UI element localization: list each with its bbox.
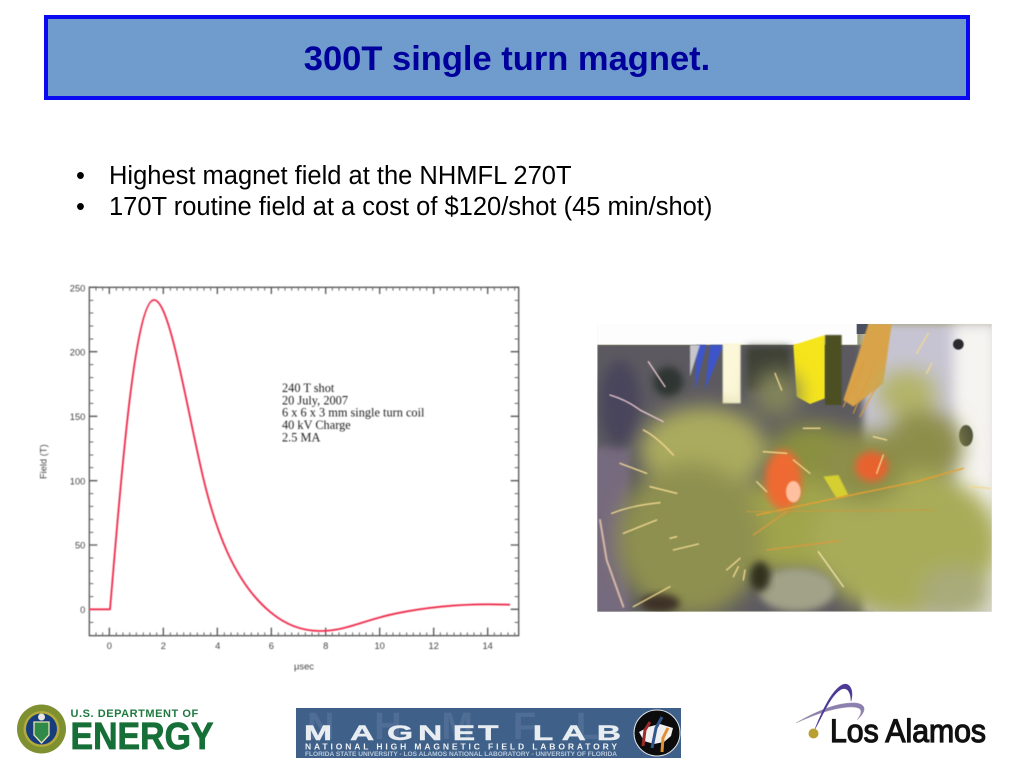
shot annotation: 20 July, 2007 <box>282 393 348 407</box>
x axis title: μsec <box>294 662 314 672</box>
bullet list: • <box>76 192 85 220</box>
glowing fragments <box>640 450 888 613</box>
laboratory name: NATIONAL HIGH MAGNETIC FIELD LABORATORY <box>305 742 617 752</box>
shot annotation: 2.5 MA <box>282 430 320 444</box>
x axis labels <box>107 641 493 651</box>
y axis labels: 0 <box>80 605 85 615</box>
bullet list: 170T routine field at a cost of $120/shot (45 min/shot) <box>109 192 712 220</box>
logo: National High Magnetic Field Laboratory <box>296 708 681 758</box>
title <box>44 15 970 100</box>
y axis labels: 50 <box>75 541 85 551</box>
x axis labels: 4 <box>215 641 220 651</box>
shot annotation: 240 T shot <box>282 381 335 395</box>
nucleus dot <box>808 728 818 738</box>
smoke cloud <box>617 370 1000 620</box>
bullet list: Highest magnet field at the NHMFL 270T <box>109 162 572 190</box>
banner background <box>296 708 681 758</box>
bullet list: • <box>76 162 85 190</box>
y axis title: Field (T) <box>39 444 49 479</box>
department text: U.S. DEPARTMENT OF <box>70 708 199 720</box>
wordmark: Los Alamos <box>830 713 986 749</box>
x axis labels: 0 <box>107 641 112 651</box>
x axis labels: 8 <box>323 641 328 651</box>
shot annotation <box>282 381 425 444</box>
x axis labels: 14 <box>482 641 493 651</box>
field curve <box>89 300 510 631</box>
y axis labels <box>70 283 85 615</box>
logo: U.S. Department of Energy <box>17 704 214 758</box>
title: 300T single turn magnet. <box>304 40 710 78</box>
shot annotation: 6 x 6 x 3 mm single turn coil <box>282 406 425 420</box>
axes frame <box>89 287 519 636</box>
backdrop <box>593 324 997 617</box>
y axis labels: 250 <box>70 283 85 293</box>
sparks <box>600 333 990 607</box>
round emblem <box>634 710 680 756</box>
orbit arcs <box>796 684 864 729</box>
photo: coil explosion <box>597 324 992 612</box>
magnet lab wordmark: MAGNET LAB <box>304 721 621 744</box>
y axis labels: 100 <box>70 476 85 486</box>
seal <box>17 704 66 754</box>
x axis labels: 12 <box>428 641 439 651</box>
x axis labels: 6 <box>269 641 274 651</box>
chart: field vs time <box>39 283 520 672</box>
bullet list <box>76 162 712 220</box>
y axis labels: 200 <box>70 347 85 357</box>
partner institutions: FLORIDA STATE UNIVERSITY - LOS ALAMOS NATIONAL LABORATORY - UNIVERSITY OF FLORIDA <box>305 751 617 758</box>
logo: Los Alamos <box>796 684 986 749</box>
x axis labels: 2 <box>161 641 166 651</box>
x axis labels: 10 <box>374 641 385 651</box>
shot annotation: 40 kV Charge <box>282 418 351 432</box>
y axis labels: 150 <box>70 412 85 422</box>
